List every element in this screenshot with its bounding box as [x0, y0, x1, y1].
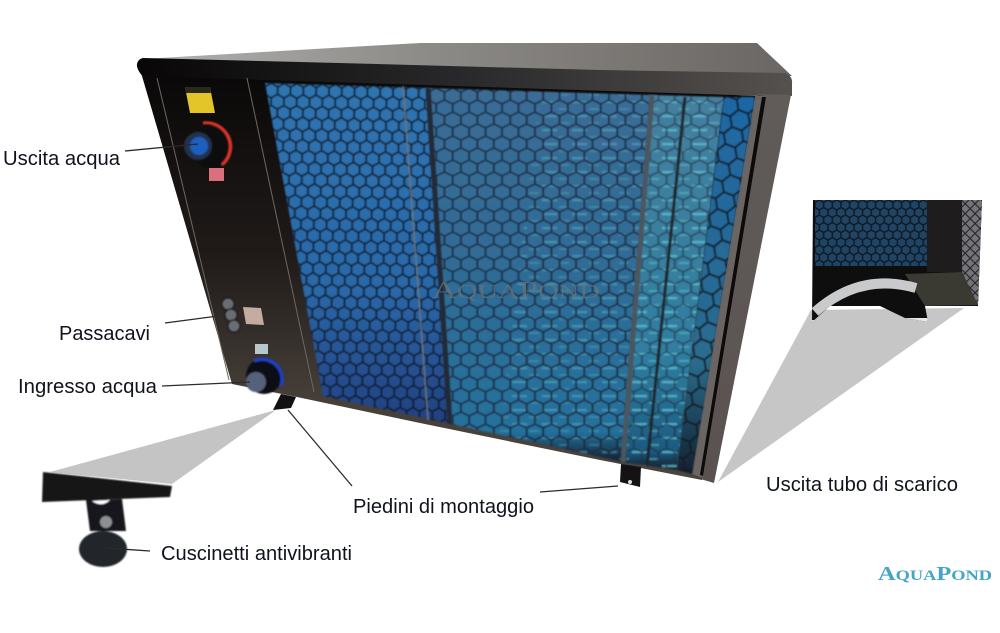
right frame strip	[692, 96, 766, 478]
lid top surface	[142, 43, 792, 76]
label: water outlet: Uscita acqua	[3, 148, 121, 170]
watermark: A QUA P OND	[432, 278, 600, 304]
frame highlights	[157, 78, 314, 392]
label: drain outlet: Uscita tubo di scarico	[766, 474, 958, 496]
label: water inlet: Ingresso acqua	[18, 376, 158, 398]
leader lines	[106, 144, 618, 551]
label: cable glands: Passacavi	[59, 323, 150, 345]
logo: AQUA POND	[878, 563, 992, 585]
inset: anti-vibration foot	[42, 472, 172, 567]
warning label	[185, 87, 215, 113]
lid front band	[137, 58, 792, 96]
mesh panel: centre section	[428, 88, 652, 462]
water outlet fitting	[184, 123, 234, 168]
water inlet fitting	[246, 358, 282, 394]
mounting foot left	[273, 394, 296, 410]
cable glands	[222, 298, 240, 332]
mesh posts	[403, 86, 685, 466]
front frame	[142, 76, 765, 480]
mesh panel: far right large hexes	[677, 97, 755, 474]
label: anti-vibration bearings: Cuscinetti antivibranti	[161, 543, 352, 565]
inlet tag	[255, 344, 268, 354]
outlet tag	[209, 168, 224, 181]
callout cone: foot	[50, 410, 276, 484]
right side panel	[697, 94, 791, 483]
heat pump unit	[137, 43, 792, 487]
inset: drain pipe photo	[812, 200, 982, 324]
mesh panel: right section	[623, 95, 724, 470]
label: mounting feet: Piedini di montaggio	[353, 496, 534, 518]
right dark slit	[700, 97, 766, 476]
gland plate label	[243, 307, 264, 325]
callout cone: drain	[718, 308, 964, 482]
mounting foot right	[620, 464, 641, 487]
mesh panel: left section	[265, 83, 451, 424]
